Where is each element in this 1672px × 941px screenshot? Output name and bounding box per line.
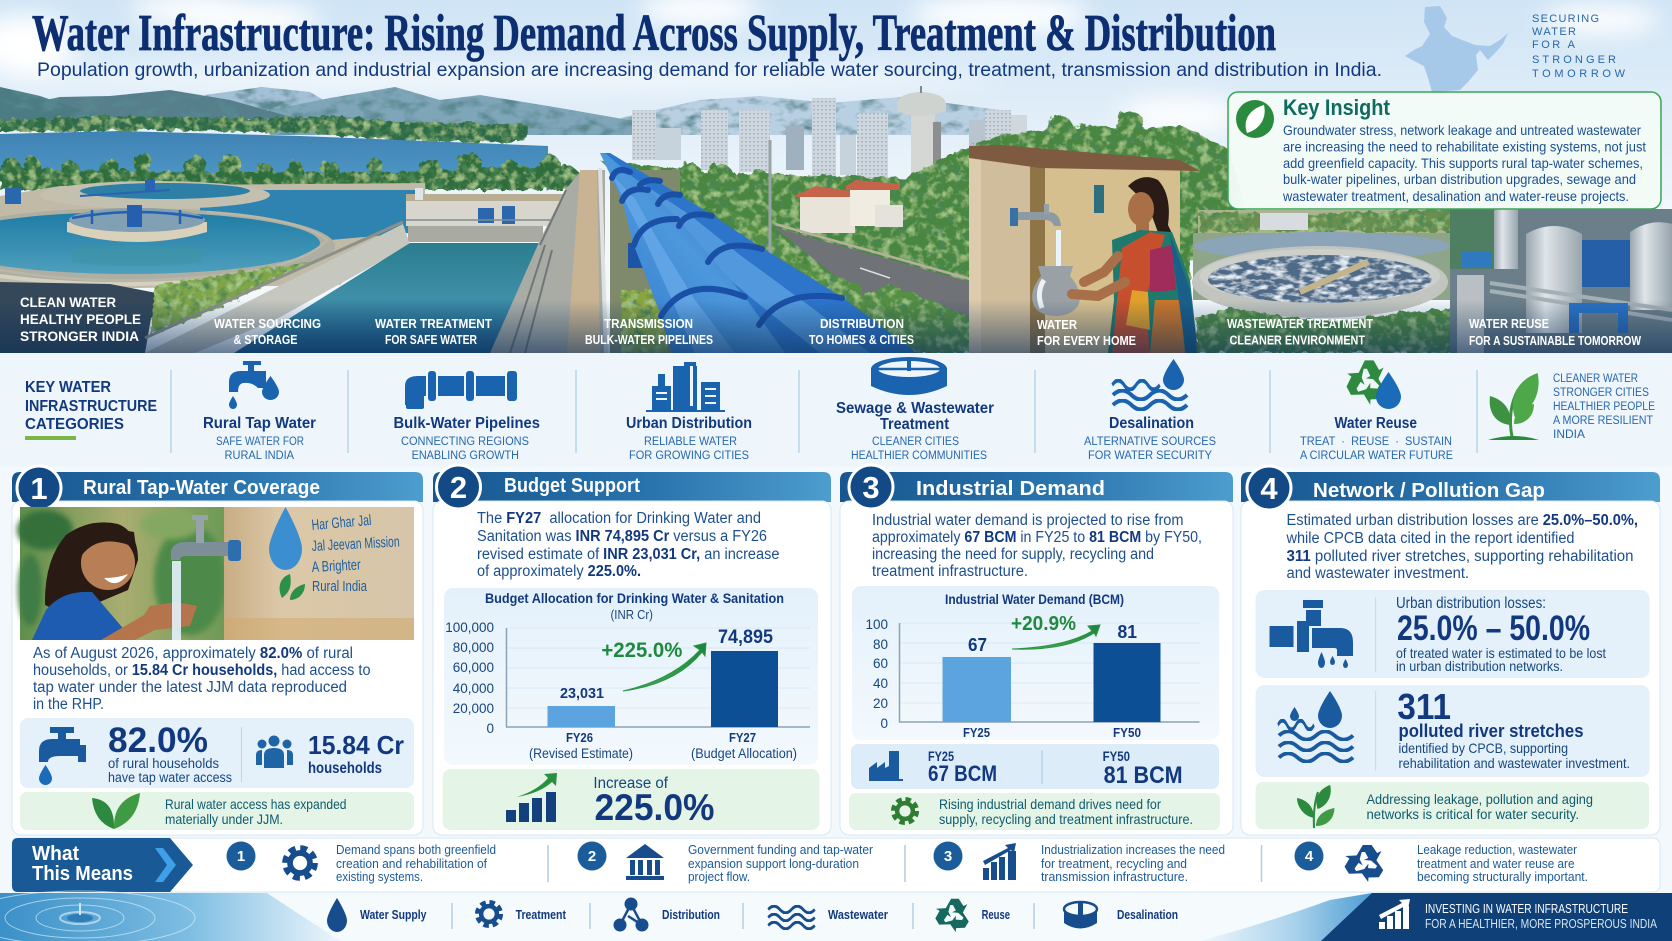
- stat: 15.84 Cr: households: [308, 760, 382, 777]
- bar chart: industrial water demand: Industrial Water Demand (BCM): [945, 592, 1124, 607]
- bar chart: budget allocation: 40,000: [453, 681, 494, 696]
- stat box: polluted river stretches: polluted river stretches: [1398, 720, 1584, 741]
- panel 3: industrial demand: [840, 465, 1233, 835]
- category: bulk-water pipelines: Bulk-Water Pipelines: [394, 415, 540, 432]
- category: desalination: ALTERNATIVE SOURCES: [1084, 436, 1216, 448]
- text: key insight body: [1282, 122, 1646, 204]
- tagline: cleaner water: A MORE RESILIENT: [1553, 415, 1653, 427]
- legend: treatment: Treatment: [516, 907, 567, 922]
- takeaway 3: transmission infrastructure.: [1041, 870, 1188, 884]
- icon: people: [256, 736, 293, 768]
- stat box: urban distribution losses: of treated water is estimated to be lost: [1396, 645, 1606, 661]
- heading: categories: INFRASTRUCTURE: [25, 398, 157, 415]
- category: sewage and wastewater treatment: HEALTHIER COMMUNITIES: [851, 450, 987, 462]
- text: network paragraph: Estimated urban distribution losses are 25.0%–50.0%,: [1286, 512, 1638, 529]
- text: budget paragraph: Sanitation was INR 74,895 Cr versus a FY26: [477, 528, 767, 545]
- concrete ground and tanks: [0, 183, 425, 290]
- takeaway 4: becoming structurally important.: [1417, 870, 1588, 884]
- heading: network / pollution gap: Network / Pollution Gap: [1313, 480, 1545, 502]
- category: rural tap water: [203, 361, 316, 462]
- bar chart: budget allocation: FY26: [566, 731, 593, 745]
- wastewater clarifier: [1192, 208, 1460, 353]
- legend: distribution: [614, 898, 720, 932]
- text: network paragraph: while CPCB data cited in the report identified: [1286, 530, 1574, 547]
- lower shade: [0, 300, 1672, 353]
- hero captions: CLEAN WATER: [20, 295, 116, 310]
- banner: what this means: What: [32, 843, 79, 865]
- back clarifier: [5, 180, 270, 209]
- legend: desalination: [1064, 902, 1178, 928]
- tagline: cleaner water: HEALTHIER PEOPLE: [1553, 401, 1655, 413]
- tagline: TOMORROW: [1532, 68, 1626, 80]
- panel 2: budget support: [433, 465, 831, 835]
- icon: India map: [1405, 6, 1508, 92]
- category: desalination: [1084, 359, 1216, 462]
- stat box: urban distribution losses: Urban distribution losses:: [1396, 595, 1546, 612]
- tagline: WATER: [1532, 26, 1576, 38]
- hero captions: WATER SOURCING: [214, 317, 321, 331]
- tagline: [1532, 13, 1626, 80]
- settling basin: [234, 243, 540, 353]
- hero captions: TO HOMES & CITIES: [809, 333, 914, 347]
- text: key insight body: wastewater treatment, desalination and water-reuse projects.: [1282, 188, 1629, 204]
- text: key insight body: Groundwater stress, network leakage and untreated wastewater: [1283, 122, 1641, 138]
- hero photo: water infrastructure scene: [0, 86, 1672, 353]
- green urban area behind pipelines: [600, 111, 1245, 353]
- legend: treatment: [477, 902, 567, 926]
- banner: what this means: This Means: [32, 863, 133, 885]
- text: network paragraph: 311 polluted river stretches, supporting rehabilitation: [1286, 548, 1634, 565]
- bar chart: budget allocation: +225.0%: [601, 639, 683, 662]
- hero captions: STRONGER INDIA: [20, 329, 139, 344]
- category: water reuse: [1300, 360, 1453, 462]
- text: rural coverage paragraph: in the RHP.: [33, 696, 104, 713]
- hero captions: [20, 295, 1641, 348]
- category: water reuse: TREAT · REUSE · SUSTAIN: [1300, 436, 1452, 448]
- sky with clouds: [0, 0, 1672, 200]
- category: water reuse: A CIRCULAR WATER FUTURE: [1300, 450, 1453, 462]
- stat: 82.0%: have tap water access: [108, 770, 232, 785]
- stat box: FY25 and FY50: 67 BCM: [928, 761, 997, 786]
- takeaway 4: treatment and water reuse are: [1417, 857, 1575, 871]
- takeaway 1: existing systems.: [336, 870, 423, 884]
- category: desalination: FOR WATER SECURITY: [1088, 450, 1212, 462]
- mountains: [0, 87, 1000, 135]
- category: bulk-water pipelines: CONNECTING REGIONS: [401, 436, 529, 448]
- bar chart: industrial water demand: 60: [873, 656, 888, 671]
- takeaway 2: 2: [588, 848, 596, 865]
- stat: 15.84 Cr: 15.84 Cr: [308, 730, 404, 760]
- metal jug: [1032, 266, 1080, 316]
- takeaway 2: expansion support long-duration: [688, 857, 859, 871]
- panel 4: network and pollution gap: [1241, 466, 1660, 835]
- stat: 82.0%: [108, 721, 232, 785]
- heading: categories: [25, 379, 157, 440]
- takeaway 3: 3: [944, 848, 952, 865]
- bar chart: industrial water demand: 67: [968, 635, 987, 655]
- takeaway 1: creation and rehabilitation of: [336, 857, 487, 871]
- bar chart: budget allocation: [444, 588, 818, 765]
- what this means strip: [12, 838, 1660, 892]
- stat box: FY25 and FY50: FY50: [1103, 749, 1130, 764]
- main clarifier: [0, 205, 335, 284]
- text: budget paragraph: revised estimate of INR 23,031 Cr, an increase: [477, 546, 780, 563]
- category: bulk-water pipelines: ENABLING GROWTH: [412, 450, 519, 462]
- bar chart: industrial water demand: 20: [873, 696, 888, 711]
- tagline: cleaner water: INDIA: [1553, 429, 1585, 441]
- icon: green plant: [1488, 373, 1539, 440]
- takeaway 3: Industrialization increases the need: [1041, 843, 1225, 857]
- panel: key water infrastructure categories: [0, 353, 1672, 467]
- heading: industrial demand: Industrial Demand: [916, 478, 1105, 500]
- category: rural tap water: SAFE WATER FOR: [216, 436, 304, 448]
- text: rural coverage paragraph: As of August 2026, approximately 82.0% of rural: [33, 645, 353, 662]
- sign: Jal Jeevan Mission: Rural India: [312, 578, 367, 595]
- takeaway 1: [226, 842, 496, 884]
- text: budget paragraph: [477, 510, 780, 580]
- house with tap stand: [969, 145, 1200, 353]
- number badge 2: 2: [450, 470, 467, 505]
- callout: addressing leakage: [1256, 782, 1649, 829]
- bar chart: industrial water demand: 40: [873, 676, 888, 691]
- legend: wastewater: Wastewater: [828, 907, 888, 922]
- stat box: polluted river stretches: [1256, 685, 1650, 777]
- number badge 3: 3: [862, 470, 880, 505]
- callout: rural water access: Rural water access has expanded: [165, 796, 346, 812]
- number badge 2: [436, 465, 480, 509]
- icon: polluted water waves: [1278, 691, 1353, 762]
- bar chart: industrial water demand: +20.9%: [1011, 613, 1076, 635]
- category: urban distribution: [626, 362, 752, 462]
- heading: budget support: Budget Support: [504, 475, 640, 497]
- text: industrial paragraph: treatment infrastructure.: [872, 563, 1028, 580]
- callout: rising industrial demand: supply, recycling and treatment infrastructure.: [939, 811, 1193, 827]
- callout: addressing leakage: Addressing leakage, pollution and aging: [1366, 791, 1593, 807]
- tagline: cleaner water: CLEANER WATER: [1553, 373, 1638, 385]
- water streaks: [1200, 893, 1372, 941]
- tagline: cleaner water: [1553, 373, 1655, 441]
- panel 1: rural tap-water coverage: [12, 466, 423, 835]
- stat box: urban distribution losses: 25.0% – 50.0%: [1397, 609, 1590, 648]
- bar chart: budget allocation: 23,031: [560, 685, 604, 702]
- water ripple image: [0, 891, 341, 941]
- text: key insight body: are increasing the need to rehabilitate existing systems, not just: [1283, 138, 1646, 154]
- bar chart: industrial water demand: FY25: [963, 726, 990, 740]
- subtitle: Population growth, urbanization and industrial expansion are increasing demand for reliable water sourcing, treatment, transmission and distribution in India.: [37, 59, 1382, 81]
- lake: [0, 131, 548, 180]
- category: sewage and wastewater treatment: CLEANER CITIES: [872, 436, 959, 448]
- bar chart: industrial water demand: 100: [865, 617, 888, 632]
- number badge 1: [17, 466, 61, 510]
- category: water reuse: Water Reuse: [1334, 415, 1417, 432]
- hero captions: WATER REUSE: [1469, 317, 1549, 331]
- hero captions: TRANSMISSION: [604, 317, 693, 331]
- stat box: urban distribution losses: in urban distribution networks.: [1396, 658, 1563, 674]
- category: bulk-water pipelines: [394, 371, 540, 462]
- stat: 82.0%: of rural households: [108, 756, 219, 771]
- woman with sari: [1072, 177, 1198, 353]
- callout: increase of 225.0%: 225.0%: [594, 787, 714, 828]
- footer band: [0, 891, 1672, 941]
- tagline: FOR A: [1532, 39, 1576, 51]
- takeaway 4: 4: [1305, 848, 1314, 865]
- category: urban distribution: FOR GROWING CITIES: [629, 450, 749, 462]
- sign: Jal Jeevan Mission: Jal Jeevan Mission: [311, 533, 400, 555]
- stat box: polluted river stretches: rehabilitation and wastewater investment.: [1398, 755, 1630, 771]
- white houses with red roofs: [796, 180, 903, 233]
- text: rural coverage paragraph: tap water under the latest JJM data reproduced: [33, 679, 347, 696]
- takeaway 2: Government funding and tap-water: [688, 843, 873, 857]
- stat: 82.0%: 82.0%: [108, 721, 208, 760]
- text: key insight body: add greenfield capacity. This supports rural tap-water schemes,: [1283, 155, 1643, 171]
- bar chart: industrial water demand: 0: [880, 716, 888, 731]
- hero captions: HEALTHY PEOPLE: [20, 312, 141, 327]
- road: [773, 227, 970, 326]
- text: network paragraph: [1286, 512, 1638, 582]
- bar chart: budget allocation: 0: [486, 721, 494, 736]
- legend: water supply: [327, 898, 427, 932]
- heading: categories: KEY WATER: [25, 379, 111, 396]
- category: rural tap water: RURAL INDIA: [224, 450, 294, 462]
- takeaway 1: 1: [237, 848, 245, 865]
- text: industrial paragraph: Industrial water demand is projected to rise from: [872, 512, 1184, 529]
- icon: tap: [39, 727, 86, 785]
- legend: reuse: Reuse: [982, 907, 1010, 922]
- callout: addressing leakage: networks is critical for water security.: [1366, 806, 1579, 822]
- hero captions: WATER TREATMENT: [375, 317, 492, 331]
- takeaway 4: Leakage reduction, wastewater: [1417, 843, 1577, 857]
- transmission pipelines: [600, 153, 917, 353]
- takeaway 4: [1294, 842, 1588, 885]
- grass strip: [150, 262, 310, 335]
- category: rural tap water: Rural Tap Water: [203, 415, 316, 432]
- bar chart: industrial water demand: FY50: [1113, 726, 1141, 740]
- legend: wastewater: [768, 906, 888, 929]
- stat box: polluted river stretches: identified by CPCB, supporting: [1398, 740, 1568, 756]
- water tower: [897, 86, 946, 177]
- category: urban distribution: Urban Distribution: [626, 415, 752, 432]
- bar chart: budget allocation: 100,000: [445, 620, 494, 635]
- bar chart: industrial water demand: [852, 586, 1219, 740]
- callout: increase of 225.0%: [442, 769, 820, 830]
- photo: girl at wall tap: [17, 507, 414, 640]
- takeaway 3: [934, 842, 1225, 884]
- bar chart: budget allocation: (Budget Allocation): [691, 746, 797, 761]
- text: rural coverage paragraph: households, or 15.84 Cr households, had access to: [33, 662, 370, 679]
- sign: Jal Jeevan Mission: A Brighter: [311, 556, 361, 576]
- dark bank: [0, 282, 182, 353]
- service walkway: [490, 168, 680, 353]
- text: budget paragraph: The FY27 allocation for Drinking Water and: [477, 510, 761, 527]
- icon: leaking pipe: [1270, 600, 1353, 668]
- text: industrial paragraph: approximately 67 BCM in FY25 to 81 BCM by FY50,: [872, 529, 1202, 546]
- hero captions: CLEANER ENVIRONMENT: [1230, 334, 1365, 348]
- category: sewage and wastewater treatment: [836, 357, 994, 462]
- category: sewage and wastewater treatment: Treatment: [880, 416, 950, 433]
- heading: key insight: Key Insight: [1283, 95, 1391, 120]
- lakeside trees: [0, 153, 600, 190]
- right pipeline: [603, 153, 917, 353]
- treatment building: [406, 188, 564, 242]
- hero captions: FOR SAFE WATER: [385, 333, 477, 347]
- stat box: FY25 and FY50: FY25: [928, 749, 954, 764]
- legend: desalination: Desalination: [1117, 907, 1178, 922]
- stat box: FY25 and FY50: [851, 744, 1219, 789]
- takeaway 3: for treatment, recycling and: [1041, 857, 1187, 871]
- category: urban distribution: RELIABLE WATER: [644, 436, 737, 448]
- takeaway 2: project flow.: [688, 870, 750, 884]
- callout: rural water access: materially under JJM.: [165, 811, 283, 827]
- category: desalination: Desalination: [1109, 415, 1194, 432]
- tagline: SECURING: [1532, 13, 1599, 25]
- banner: what this means: [12, 838, 193, 892]
- wall tap and water stream: [1010, 204, 1061, 266]
- stat box: FY25 and FY50: 81 BCM: [1104, 762, 1183, 789]
- hero captions: FOR EVERY HOME: [1037, 334, 1136, 348]
- bar chart: industrial water demand: 80: [873, 637, 888, 652]
- stat box: urban distribution losses: [1256, 590, 1650, 678]
- category: sewage and wastewater treatment: Sewage & Wastewater: [836, 400, 994, 417]
- number badge 1: 1: [30, 471, 48, 506]
- bar chart: budget allocation: (Revised Estimate): [529, 746, 633, 761]
- callout: rural water access: [20, 792, 414, 830]
- banner: investing in water infrastructure: [1321, 893, 1672, 941]
- takeaway 2: [578, 842, 873, 884]
- stat: 15.84 Cr: [308, 730, 404, 777]
- bar chart: budget allocation: FY27: [729, 731, 756, 745]
- bar chart: budget allocation: Budget Allocation for Drinking Water & Sanitation: [485, 591, 784, 606]
- takeaway 1: Demand spans both greenfield: [336, 843, 496, 857]
- skyline towers: [632, 98, 1027, 178]
- water reuse plant: [1450, 209, 1672, 353]
- callout: increase of 225.0%: Increase of: [593, 775, 669, 792]
- stat box: polluted river stretches: 311: [1397, 686, 1451, 727]
- callout: rising industrial demand: [849, 793, 1220, 830]
- tagline: cleaner water: STRONGER CITIES: [1553, 387, 1649, 399]
- far tree line: [0, 116, 530, 142]
- text: key insight body: bulk-water pipelines, urban distribution upgrades, sewage and: [1283, 171, 1636, 187]
- panel: key insight: [1228, 92, 1661, 209]
- number badge 4: [1247, 466, 1291, 510]
- heading: rural tap-water coverage: Rural Tap-Water Coverage: [83, 477, 320, 499]
- text: industrial paragraph: increasing the need for supply, recycling and: [872, 546, 1154, 563]
- hero captions: & STORAGE: [234, 333, 298, 347]
- legend: water supply: Water Supply: [360, 907, 427, 922]
- callout: rising industrial demand: Rising industrial demand drives need for: [939, 796, 1161, 812]
- text: network paragraph: and wastewater investment.: [1286, 565, 1469, 582]
- left pipeline: [600, 153, 785, 353]
- stat box: rural coverage: [20, 718, 414, 788]
- legend: distribution: Distribution: [662, 907, 720, 922]
- text: budget paragraph: of approximately 225.0%.: [477, 563, 641, 580]
- number badge 4: 4: [1260, 471, 1278, 506]
- roadside bushes: [718, 205, 970, 353]
- heading: categories: CATEGORIES: [25, 416, 124, 433]
- bar chart: budget allocation: 74,895: [718, 627, 773, 648]
- hero captions: DISTRIBUTION: [820, 317, 904, 331]
- retaining wall: [145, 224, 410, 353]
- bar chart: industrial water demand: 81: [1118, 622, 1137, 642]
- hero captions: WASTEWATER TREATMENT: [1227, 317, 1373, 331]
- hero captions: WATER: [1037, 318, 1077, 332]
- bar chart: budget allocation: 20,000: [453, 701, 494, 716]
- tagline: STRONGER: [1532, 54, 1616, 66]
- bar chart: budget allocation: 80,000: [453, 640, 494, 655]
- sign: Jal Jeevan Mission: Har Ghar Jal: [311, 512, 372, 534]
- icon: leaf badge: [1236, 100, 1274, 138]
- text: industrial paragraph: [872, 512, 1202, 580]
- number badge 3: [849, 465, 893, 509]
- sign: Jal Jeevan Mission: [269, 507, 400, 600]
- hero captions: BULK-WATER PIPELINES: [585, 333, 713, 347]
- legend: reuse: [931, 899, 1010, 935]
- bar chart: budget allocation: (INR Cr): [610, 607, 653, 622]
- bar chart: budget allocation: 60,000: [453, 660, 494, 675]
- text: rural coverage paragraph: [33, 645, 370, 713]
